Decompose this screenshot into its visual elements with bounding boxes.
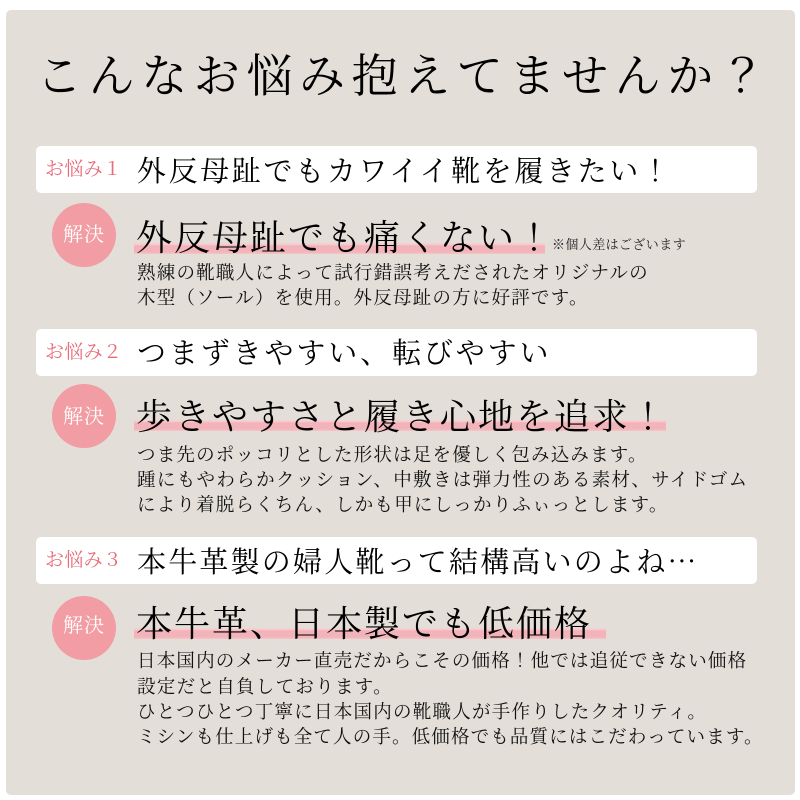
solution text 1: 木型（ソール）を使用。外反母趾の方に好評です。 — [137, 289, 589, 309]
solution badge 2 — [52, 384, 116, 448]
panel: worry 3 — [36, 537, 764, 748]
solution heading 2: 歩きやすさと履き心地を追求！ — [136, 397, 668, 437]
solution text 3: 日本国内のメーカー直売だからこその価格！他では追従できない価格 — [137, 652, 747, 672]
worry 3 bar — [36, 537, 757, 584]
title: こんなお悩み抱えてませんか？ — [36, 51, 772, 102]
solution text 3 — [137, 650, 764, 748]
worry 2 heading: つまずきやすい、転びやすい — [137, 338, 551, 370]
worry 3 heading: 本牛革製の婦人靴って結構高いのよね… — [137, 540, 699, 581]
panel: worry 1 — [36, 146, 757, 309]
solution text 1: 熟練の靴職人によって試行錯誤考えだされたオリジナルの — [137, 264, 649, 284]
panel: worry 2 — [36, 329, 757, 516]
worry 1 label: お悩み１ — [45, 159, 122, 180]
solution badge 3 — [52, 596, 116, 660]
worry 1 heading: 外反母趾でもカワイイ靴を履きたい！ — [137, 156, 673, 188]
solution heading 1: 外反母趾でも痛くない！ — [136, 218, 554, 258]
solution heading 3: 本牛革、日本製でも低価格 — [136, 604, 592, 644]
worry 2 bar — [36, 329, 757, 376]
worry 3 label: お悩み３ — [45, 550, 122, 571]
note: ※個人差はございます — [552, 237, 686, 252]
solution text 1 — [137, 262, 649, 309]
solution badge 3: 解決 — [63, 615, 105, 637]
solution text 2 — [137, 444, 748, 516]
solution text 2: つま先のポッコリとした形状は足を優しく包み込みます。 — [137, 446, 648, 466]
solution text 3: ひとつひとつ丁寧に日本国内の靴職人が手作りしたクオリティ。 — [137, 703, 707, 723]
solution text 2: 踵にもやわらかクッション、中敷きは弾力性のある素材、サイドゴム — [137, 471, 748, 491]
solution badge 2: 解決 — [63, 406, 105, 428]
solution text 2: により着脱らくちん、しかも甲にしっかりふぃっとします。 — [137, 496, 669, 516]
worry 2 label: お悩み２ — [45, 342, 122, 363]
solution badge 1 — [52, 203, 116, 267]
solution badge 1: 解決 — [63, 224, 105, 246]
highlight 2 — [134, 420, 666, 431]
highlight 3 — [134, 628, 606, 639]
solution text 3: ミシンも仕上げも全て人の手。低価格でも品質にはこだわっています。 — [137, 728, 764, 748]
solution text 3: 設定だと自負しております。 — [137, 678, 393, 698]
highlight 1 — [134, 243, 545, 254]
worry 1 bar — [36, 146, 757, 193]
